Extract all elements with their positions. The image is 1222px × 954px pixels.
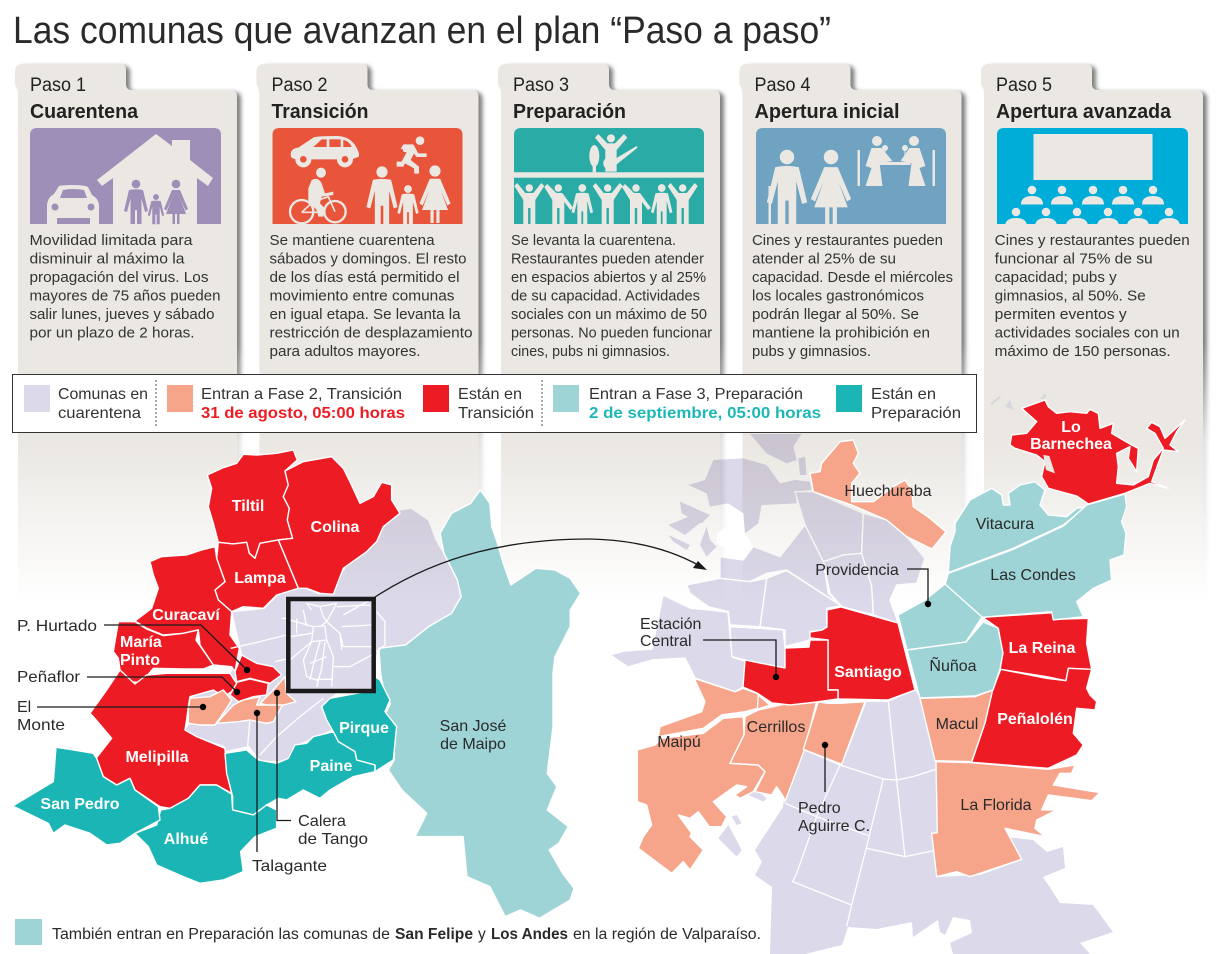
text block: en espacios abiertos y al 25%: [511, 269, 706, 286]
labels: mapa regional: Alhué: [164, 831, 208, 848]
labels: mapa gran santiago: Barnechea: [1030, 436, 1112, 453]
labels: mapa gran santiago: [657, 419, 1112, 814]
icon: concert stage and crowd: [514, 128, 704, 224]
comunas que entran a fase 2: poniente: [637, 678, 865, 873]
labels: mapa regional: Paine: [310, 758, 352, 775]
límites comunales sur: [785, 702, 937, 927]
comunas que entran a fase 2: [188, 677, 296, 725]
comunas que entran a fase 3: Vitacura y Las Condes: [945, 482, 1127, 620]
text block: movimiento entre comunas: [270, 288, 454, 304]
heading: Cuarentena: [30, 101, 139, 123]
labels: mapa gran santiago: Cerrillos: [747, 719, 805, 736]
comunas en cuarentena: sur: [755, 690, 1113, 954]
callouts: mapa gran santiago: Estación: [640, 616, 701, 633]
labels: mapa gran santiago: Peñalolén: [997, 711, 1073, 728]
legend item: están en preparación: Están en: [871, 386, 936, 403]
legend item: entran a fase 2: 31 de agosto, 05:00 horas: [201, 405, 405, 422]
labels: mapa regional: Lampa: [234, 570, 286, 587]
legend: [12, 374, 976, 432]
text block: salir lunes, jueves y sábado: [30, 306, 214, 323]
callouts: mapa regional: El: [17, 699, 31, 716]
step label: Paso 3: [513, 75, 569, 96]
legend item: entran a fase 3: 2 de septiembre, 05:00 horas: [589, 405, 821, 422]
text block: capacidad. Desde el miércoles: [752, 269, 953, 286]
step label: Paso 4: [754, 75, 811, 96]
labels: mapa gran santiago: Lo: [1061, 419, 1081, 436]
recuadro del gran santiago: [288, 599, 374, 691]
text block: actividades sociales con un: [995, 324, 1180, 342]
callouts: mapa regional: Peñaflor: [17, 669, 81, 686]
panel: paso 1 cuarentena: [15, 64, 241, 612]
labels: mapa gran santiago: Vitacura: [976, 516, 1034, 533]
callouts: mapa regional: [17, 618, 368, 875]
title: Las comunas que avanzan en el plan “Paso a paso”: [13, 10, 831, 52]
límites comunales: [231, 600, 385, 755]
text block: mayores de 75 años pueden: [30, 288, 220, 304]
callouts: mapa gran santiago: Providencia: [815, 562, 899, 579]
comunas sueltas: [718, 790, 767, 857]
callouts: mapa gran santiago: Pedro: [798, 800, 841, 817]
heading: Transición: [272, 101, 368, 123]
labels: mapa gran santiago: Santiago: [834, 664, 902, 681]
icon: house family and car: [30, 128, 221, 224]
text block: Restaurantes pueden atender: [511, 250, 704, 268]
footnote: También entran en Preparación las comunas de: [52, 926, 390, 943]
callouts: mapa regional: Monte: [17, 717, 65, 734]
labels: mapa regional: Pirque: [339, 720, 389, 737]
text block: pubs y gimnasios.: [752, 343, 871, 360]
heading: Preparación: [513, 101, 626, 123]
labels: mapa gran santiago: Ñuñoa: [929, 655, 977, 675]
comunas que entran a fase 2: Huechuraba: [810, 440, 946, 549]
labels: mapa gran santiago: Macul: [936, 716, 978, 733]
text block: personas. No pueden funcionar: [511, 324, 712, 342]
legend item: comunas en cuarentena: cuarentena: [58, 405, 141, 422]
panel: paso 4 apertura inicial: [740, 64, 966, 612]
comunas en preparación: [13, 677, 397, 883]
labels: mapa regional: Pinto: [120, 652, 160, 669]
text block: por un plazo de 2 horas.: [30, 324, 194, 342]
labels: mapa gran santiago: Huechuraba: [844, 483, 932, 500]
text block: en igual etapa. Se levanta la: [270, 306, 461, 323]
icon: car runner cyclist family: [272, 128, 462, 225]
text block: gimnasios, al 50%. Se: [995, 288, 1146, 304]
labels: mapa gran santiago: Maipú: [657, 734, 701, 751]
comuna: San José de Maipo: [379, 490, 581, 918]
comunas que entran a fase 3: Providencia y Ñuñoa: [898, 584, 1003, 698]
comuna: Pudahuel: [610, 595, 747, 692]
comuna: Lo Barnechea: [990, 393, 1185, 504]
text block: Movilidad limitada para: [30, 232, 193, 249]
legend item: entran a fase 2: Entran a Fase 2, Transición: [201, 386, 402, 403]
text block: cines, pubs ni gimnasios.: [511, 343, 670, 360]
labels: mapa regional: María: [120, 634, 162, 651]
comunas en cuarentena: norte: [668, 434, 925, 668]
text block: permiten eventos y: [995, 306, 1127, 323]
heading: Apertura inicial: [754, 101, 900, 123]
callouts: mapa gran santiago: [640, 562, 931, 835]
text block: atender al 25% de su: [752, 250, 896, 268]
heading: Apertura avanzada: [996, 101, 1172, 123]
text block: [752, 232, 953, 360]
text block: mantiene la prohibición en: [752, 324, 930, 342]
legend item: están en transición: Transición: [458, 405, 534, 422]
callouts: mapa regional: P. Hurtado: [17, 618, 97, 635]
labels: mapa regional: Curacaví: [152, 607, 220, 624]
legend item: entran a fase 2: [167, 385, 405, 422]
callouts: mapa gran santiago: Central: [640, 633, 692, 650]
labels: mapa gran santiago: Las Condes: [990, 567, 1076, 584]
comunas en cuarentena: [184, 508, 461, 762]
footnote: Los Andes: [491, 926, 568, 943]
labels: mapa regional: San Pedro: [40, 796, 120, 813]
legend item: están en transición: [423, 385, 534, 422]
labels: mapa regional: Melipilla: [125, 749, 189, 766]
step label: Paso 5: [996, 75, 1052, 96]
comunas en transición: oriente: [972, 613, 1097, 768]
text block: funcionar al 75% de su: [995, 250, 1153, 268]
map: región metropolitana: [13, 450, 581, 918]
footnote: y: [478, 926, 486, 943]
labels: mapa regional: [40, 498, 506, 848]
legend item: están en transición: Están en: [458, 386, 522, 403]
labels: mapa regional: San José: [440, 718, 506, 735]
arrow: recuadro a mapa de Santiago: [375, 539, 707, 597]
footnote: San Felipe: [395, 926, 473, 943]
legend item: comunas en cuarentena: [24, 385, 148, 422]
step label: Paso 1: [30, 75, 86, 96]
map: gran santiago: [610, 393, 1185, 954]
legend item: entran a fase 3: [553, 385, 821, 422]
text block: [270, 232, 472, 360]
labels: mapa gran santiago: La Reina: [1009, 640, 1075, 657]
text block: [995, 232, 1190, 360]
text block: de los días está permitido el: [270, 269, 460, 286]
legend item: están en preparación: [836, 385, 961, 422]
text block: disminuir al máximo la: [30, 250, 185, 268]
text block: sociales con un máximo de 50: [511, 306, 707, 323]
text block: Se mantiene cuarentena: [270, 232, 435, 249]
parche blanco: [717, 503, 753, 560]
text block: [511, 232, 712, 360]
labels: mapa regional: Colina: [311, 519, 360, 536]
text block: Se levanta la cuarentena.: [511, 232, 676, 249]
comuna: Melipilla: [90, 670, 237, 808]
icon: cinema: [997, 128, 1188, 228]
labels: mapa regional: de Maipo: [440, 736, 506, 753]
comunas en transición: centro: [743, 607, 915, 705]
footnote: [15, 919, 761, 945]
callouts: mapa regional: de Tango: [298, 831, 368, 848]
text block: Cines y restaurantes pueden: [752, 232, 943, 249]
text block: podrán llegar al 50%. Se: [752, 306, 919, 323]
text block: [30, 232, 220, 342]
text block: para adultos mayores.: [270, 343, 420, 360]
panel: paso 3 preparación: [498, 64, 724, 612]
text block: sábados y domingos. El resto: [270, 250, 466, 268]
step label: Paso 2: [272, 75, 328, 96]
text block: máximo de 150 personas.: [995, 343, 1171, 360]
footnote: en la región de Valparaíso.: [573, 926, 761, 943]
callouts: mapa regional: Calera: [298, 813, 346, 830]
text block: los locales gastronómicos: [752, 288, 924, 304]
text block: restricción de desplazamiento: [270, 324, 472, 342]
callouts: mapa regional: Talagante: [252, 858, 327, 875]
labels: mapa regional: Tiltil: [232, 498, 264, 515]
text block: propagación del virus. Los: [30, 269, 208, 286]
comunas que entran a fase 2: oriente: [920, 690, 1100, 877]
text block: capacidad; pubs y: [995, 269, 1117, 286]
panel: paso 2 transición: [256, 64, 482, 612]
panel: paso 5 apertura avanzada: [981, 64, 1207, 612]
comunas en transición: norte: [113, 450, 400, 702]
text block: de su capacidad. Actividades: [511, 288, 700, 304]
callouts: mapa gran santiago: Aguirre C.: [798, 818, 870, 835]
legend item: entran a fase 3: Entran a Fase 3, Preparación: [589, 386, 803, 403]
legend item: están en preparación: Preparación: [871, 405, 961, 422]
text block: Cines y restaurantes pueden: [995, 232, 1190, 249]
labels: mapa gran santiago: La Florida: [960, 797, 1032, 814]
legend item: comunas en cuarentena: Comunas en: [58, 386, 148, 403]
icon: seniors and restaurant table: [756, 128, 946, 224]
